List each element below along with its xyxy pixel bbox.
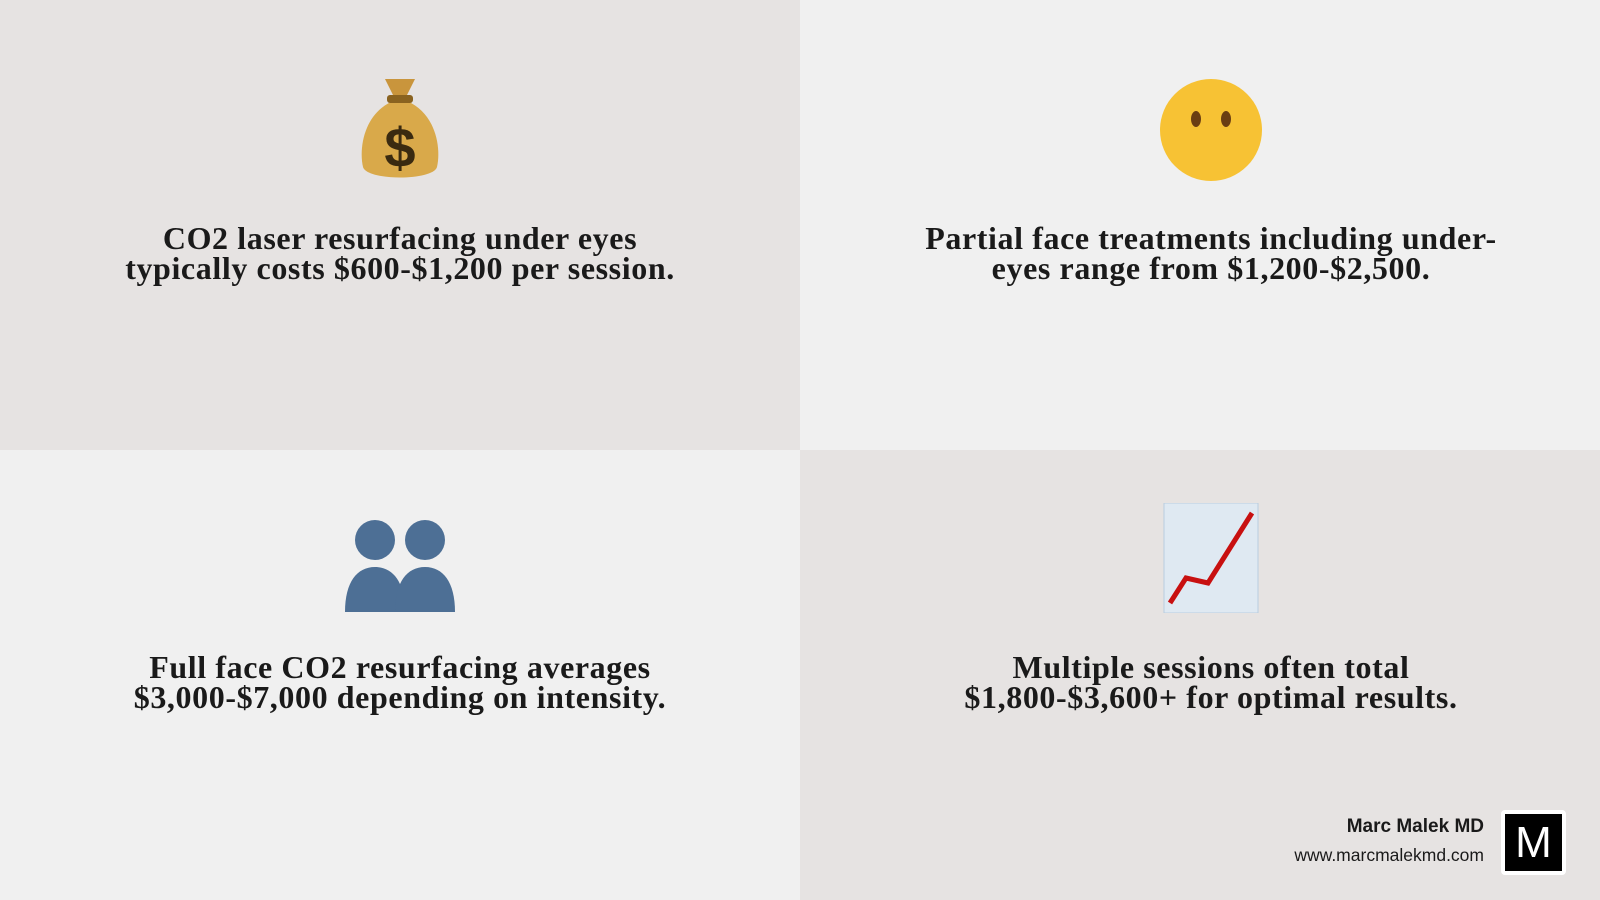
- logo: M: [1515, 818, 1552, 867]
- panel: partial face: [800, 0, 1600, 450]
- text: multiple sessions: $1,800-$3,600+ for optimal results.: [964, 679, 1458, 715]
- text: partial face: Partial face treatments including under-: [925, 220, 1497, 256]
- text: full face: $3,000-$7,000 depending on intensity.: [134, 679, 666, 715]
- text: under-eye cost: CO2 laser resurfacing under eyes: [163, 220, 637, 256]
- icon: face without mouth: [1160, 79, 1262, 181]
- text: under-eye cost: typically costs $600-$1,200 per session.: [125, 250, 675, 286]
- panel: multiple sessions: [800, 450, 1600, 900]
- text: full face: Full face CO2 resurfacing averages: [149, 649, 651, 685]
- text: multiple sessions: Multiple sessions often total: [1013, 649, 1409, 685]
- icon: chart increasing: [1164, 503, 1258, 613]
- logo: [1501, 810, 1566, 875]
- icon: money bag: [362, 79, 438, 179]
- brand url: www.marcmalekmd.com: [1294, 845, 1484, 865]
- text: full face: [134, 649, 666, 715]
- text: partial face: [925, 220, 1497, 286]
- icon: busts: [345, 520, 455, 612]
- icon: money bag: $: [384, 116, 416, 179]
- brand name: Marc Malek MD: [1347, 816, 1484, 837]
- text: multiple sessions: [964, 649, 1458, 715]
- text: partial face: eyes range from $1,200-$2,500.: [992, 250, 1430, 286]
- text: under-eye cost: [125, 220, 675, 286]
- panel: full face: [0, 450, 800, 900]
- panel: under-eye cost: [0, 0, 800, 450]
